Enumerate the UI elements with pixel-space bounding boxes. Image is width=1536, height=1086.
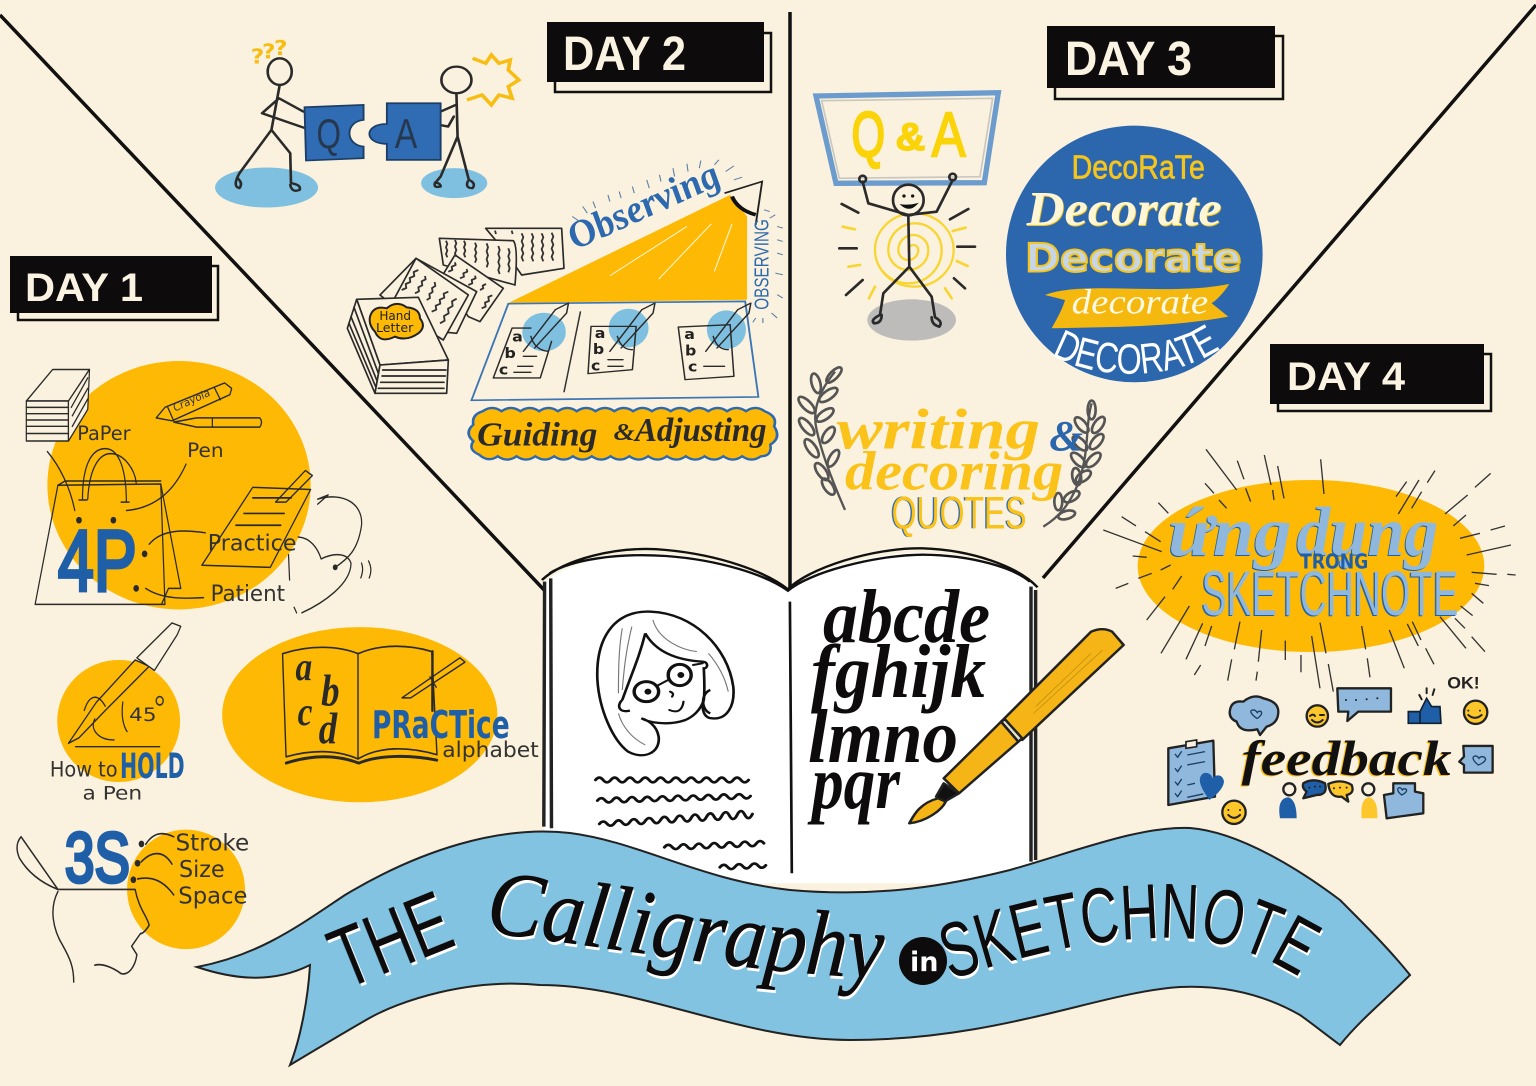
classroom worksheets: b: [685, 342, 696, 359]
decorate lettering circle: Decorate: [1026, 183, 1222, 236]
guiding and adjusting banner: &: [614, 419, 635, 446]
writing and decorating quotes: QUOTES: [892, 487, 1027, 538]
how to hold a pen: a Pen: [82, 783, 142, 805]
feedback icons: OK!: [1447, 673, 1480, 692]
4P materials diagram: PaPer: [77, 423, 131, 446]
practice alphabet: [222, 627, 539, 802]
3S head diagram: 3S: [65, 818, 130, 897]
observing cone and text: [508, 153, 783, 323]
alphabet lettering: lmno: [808, 695, 958, 779]
guiding and adjusting banner: Adjusting: [633, 411, 767, 449]
decorate lettering circle: decorate: [1072, 282, 1208, 321]
how to hold a pen: How to: [50, 757, 118, 782]
practice alphabet: PRaCTice: [372, 704, 510, 748]
classroom worksheets: b: [505, 345, 516, 362]
ung dung trong sketchnote: ứng: [1168, 494, 1292, 571]
title ribbon: [193, 826, 1412, 1068]
writing and decorating quotes: decoring: [845, 440, 1063, 501]
handout papers and hand letter book: Letter: [376, 320, 414, 335]
guiding and adjusting banner: Guiding: [477, 416, 597, 453]
classroom worksheets: c: [591, 357, 600, 374]
classroom worksheets: [471, 301, 758, 400]
observing cone and text: OBSERVING: [752, 219, 774, 310]
3S head diagram: Space: [178, 883, 247, 910]
feedback icons: [1168, 673, 1493, 824]
4P materials diagram: Patient: [211, 580, 285, 606]
classroom worksheets: b: [593, 341, 604, 358]
Q and A puzzle figures: A: [395, 112, 418, 158]
ung dung trong sketchnote: TRONG: [1300, 549, 1368, 573]
practice alphabet: d: [319, 704, 338, 753]
title ribbon: Calligraphy: [492, 876, 886, 1000]
ung dung trong sketchnote: dụng: [1297, 494, 1438, 571]
guiding and adjusting banner: [469, 408, 777, 460]
decorate lettering circle: Decorate: [1025, 237, 1242, 282]
practice alphabet: a: [296, 644, 312, 689]
classroom worksheets: a: [684, 326, 695, 343]
4P materials diagram: [26, 361, 371, 613]
decorate lettering circle: DECORATE: [1054, 324, 1220, 374]
title ribbon: in: [910, 947, 938, 978]
icon: portrait: [597, 612, 734, 755]
how to hold a pen: 45: [129, 705, 157, 726]
observing cone and text: Observing: [559, 153, 728, 257]
ung dung trong sketchnote: [1103, 449, 1516, 692]
alphabet lettering: [807, 575, 990, 825]
alphabet lettering: abcde: [823, 575, 990, 659]
heading: day 1: [10, 256, 218, 320]
Q and A sign with figure: Q: [852, 100, 885, 170]
classroom worksheets: c: [688, 359, 697, 375]
Q and A puzzle figures: ?: [262, 40, 276, 64]
writing and decorating quotes: writing: [837, 399, 1040, 461]
heading: day 4: [1270, 344, 1491, 411]
heading: day 3: [1047, 26, 1283, 99]
writing and decorating quotes: &: [1049, 413, 1083, 461]
panel: day 4: [1103, 344, 1516, 824]
feedback icons: feedback: [1242, 730, 1452, 786]
panel: day 2: [215, 22, 783, 460]
Q and A puzzle figures: [215, 37, 519, 207]
writing and decorating quotes: [796, 365, 1107, 538]
heading: day 1: DAY 1: [25, 266, 143, 310]
4P materials diagram: Pen: [187, 440, 224, 462]
heading: day 2: DAY 2: [563, 28, 686, 81]
alphabet lettering: pqr: [807, 741, 901, 825]
Q and A sign with figure: &: [897, 116, 924, 157]
Q and A sign with figure: [816, 93, 998, 341]
heading: day 3: DAY 3: [1065, 33, 1192, 86]
panel: day 1: [10, 256, 539, 982]
3S head diagram: [17, 818, 249, 982]
text scribbles: [595, 778, 766, 869]
alphabet lettering: fghijk: [811, 630, 986, 714]
4P materials diagram: 4P: [58, 512, 137, 609]
practice alphabet: c: [298, 689, 312, 734]
title ribbon: THE: [317, 874, 465, 1008]
classroom worksheets: a: [595, 325, 605, 342]
classroom worksheets: a: [512, 328, 523, 345]
classroom worksheets: c: [499, 362, 508, 378]
practice alphabet: b: [321, 666, 340, 715]
3S head diagram: Size: [179, 856, 225, 883]
Q and A puzzle figures: ?: [274, 37, 288, 61]
icon: fountain pen: [909, 629, 1124, 823]
Q and A sign with figure: A: [932, 100, 966, 170]
decorate lettering circle: [1006, 126, 1263, 382]
Q and A puzzle figures: Q: [317, 112, 341, 158]
title ribbon: SKETCHNOTE: [940, 884, 1324, 979]
4P materials diagram: Crayola: [172, 387, 212, 415]
handout papers and hand letter book: [347, 228, 564, 393]
heading: day 2: [547, 22, 771, 92]
handout papers and hand letter book: Hand: [379, 308, 411, 323]
Q and A puzzle figures: ?: [251, 45, 264, 69]
4P materials diagram: Practice: [208, 530, 297, 556]
heading: day 4: DAY 4: [1287, 355, 1406, 399]
how to hold a pen: [50, 623, 185, 805]
center open book: [542, 548, 1124, 883]
panel: day 3: [756, 26, 1284, 578]
practice alphabet: alphabet: [442, 737, 539, 762]
how to hold a pen: HOLD: [120, 745, 185, 787]
3S head diagram: Stroke: [176, 830, 249, 857]
decorate lettering circle: DecoRaTe: [1072, 149, 1205, 186]
